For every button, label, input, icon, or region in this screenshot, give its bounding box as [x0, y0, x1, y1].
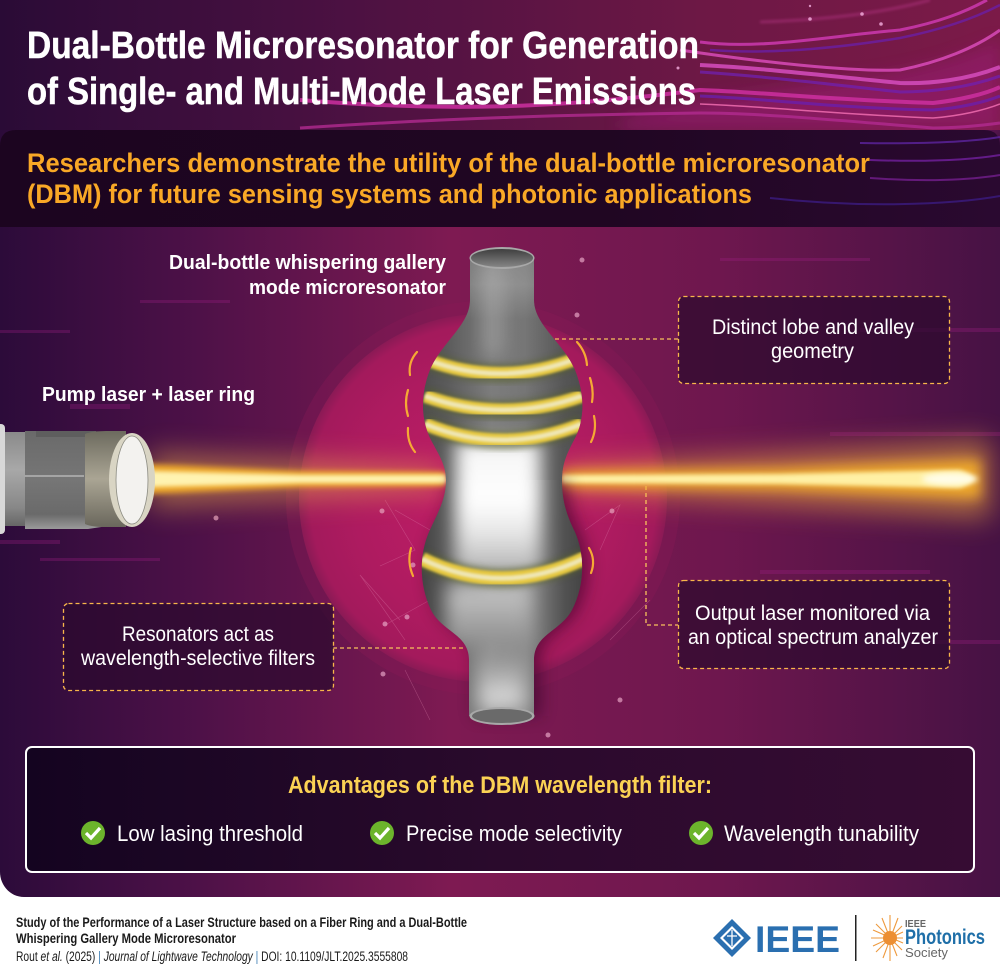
- subtitle band: [0, 130, 1000, 227]
- subtitle: [27, 148, 870, 209]
- callout: output laser: Output laser monitored via: [695, 602, 930, 625]
- dual-bottle microresonator: [420, 247, 590, 730]
- callout: lobe and valley geometry: [678, 296, 950, 384]
- label: resonator: Dual-bottle whispering gallery: [169, 252, 447, 274]
- subtitle: Researchers demonstrate the utility of the dual-bottle microresonator: [27, 148, 870, 178]
- label: resonator: mode microresonator: [249, 277, 446, 299]
- callout: wavelength-selective filters: wavelength-selective filters: [80, 647, 315, 670]
- glowing disc: [214, 258, 680, 738]
- title: [27, 25, 699, 113]
- network dots and lines: [360, 500, 650, 720]
- band streaks: [770, 137, 1000, 204]
- bright waist highlight: [447, 440, 540, 707]
- background streaks: [0, 258, 1000, 644]
- citation: Rout et al. (2025) | Journal of Lightwave Technology | DOI: 10.1109/JLT.2025.3555808: [16, 949, 408, 964]
- callout: lobe and valley geometry: Distinct lobe and valley: [712, 316, 914, 339]
- logo: IEEE: [713, 919, 840, 960]
- label: resonator: [170, 254, 446, 294]
- logo divider: [855, 915, 856, 961]
- citation: Whispering Gallery Mode Microresonator: [16, 930, 236, 946]
- callout: lobe and valley geometry: geometry: [771, 340, 854, 363]
- beam glow: wide halo behind beams: [150, 440, 990, 518]
- advantages heading: Advantages of the DBM wavelength filter:: [288, 772, 712, 799]
- panel: advantages: [26, 747, 974, 872]
- label: pump laser: Pump laser + laser ring: [42, 384, 255, 406]
- top rim: [470, 247, 534, 269]
- callout: output laser: [678, 580, 950, 668]
- title: Dual-Bottle Microresonator for Generation: [27, 25, 699, 67]
- callout: output laser: an optical spectrum analyzer: [688, 626, 938, 649]
- right laser beam: [560, 460, 980, 498]
- resonance bands: [422, 358, 585, 578]
- header sparkle dots: [676, 5, 883, 69]
- header light streaks: [300, 0, 1000, 130]
- logo: IEEE Photonics Society: [871, 915, 985, 961]
- callout: wavelength-selective filters: Resonators act as: [122, 623, 274, 646]
- resonance arcs: [406, 342, 595, 576]
- subtitle: (DBM) for future sensing systems and photonic applications: [27, 179, 752, 209]
- title: of Single- and Multi-Mode Laser Emissions: [27, 71, 696, 113]
- logo: IEEE Photonics Society: IEEE: [905, 918, 926, 930]
- item: low lasing threshold: Low lasing threshold: [117, 821, 303, 846]
- pump laser device: [0, 424, 155, 534]
- citation: [16, 914, 467, 964]
- callout connectors: [333, 339, 678, 648]
- logo: IEEE Photonics Society: Society: [905, 945, 948, 960]
- callout: wavelength-selective filters: [64, 604, 334, 690]
- item: precise mode selectivity: Precise mode selectivity: [406, 821, 622, 846]
- logo: IEEE: IEEE: [755, 919, 840, 960]
- item: wavelength tunability: Wavelength tunability: [724, 821, 919, 846]
- bottom rim: [470, 707, 534, 725]
- bottle shadow: [428, 480, 588, 716]
- left laser beam: [148, 464, 446, 494]
- citation: Study of the Performance of a Laser Structure based on a Fiber Ring and a Dual-Bottle: [16, 914, 467, 930]
